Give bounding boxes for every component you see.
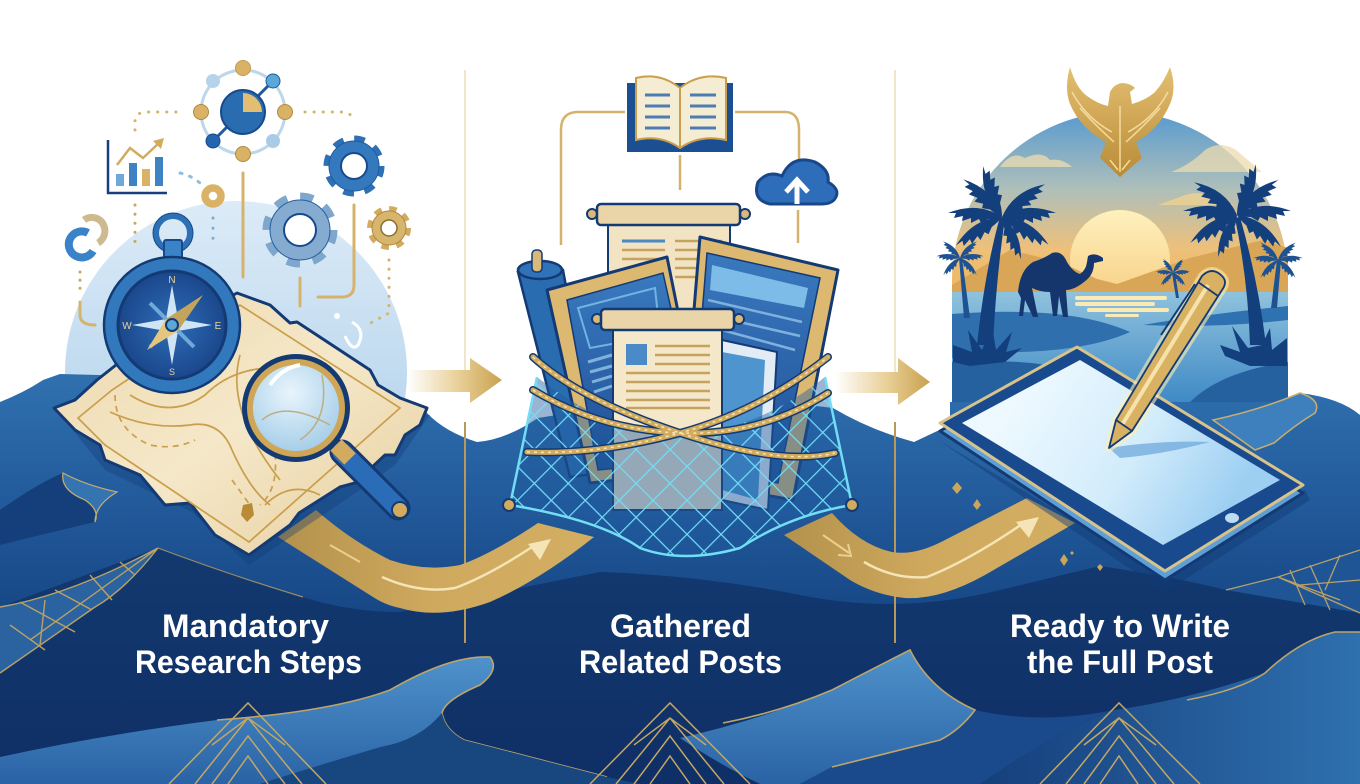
net corner weights (503, 499, 858, 511)
arrow: winding gold ribbon 2 (784, 498, 1075, 598)
icon: cloud upload (756, 160, 837, 204)
tablet: small (722, 340, 777, 510)
icon: compass: E (215, 321, 222, 332)
small white dashes near the circle (334, 313, 361, 347)
curl dune: right (1213, 393, 1317, 450)
panel background: light blue circle (65, 201, 407, 543)
distant hills (952, 240, 1288, 295)
small palms (936, 240, 1303, 318)
heading: the Full Post: the Full Post (1027, 644, 1213, 680)
connector lines (80, 112, 389, 325)
heading: Mandatory: Mandatory (162, 608, 329, 644)
camel (1018, 252, 1103, 317)
dune: lower right (980, 632, 1360, 784)
panel: gathered posts (503, 76, 858, 556)
icon: bar chart (108, 138, 167, 193)
gold triangles (169, 703, 1200, 784)
water bands (1143, 306, 1288, 326)
dunes: upper layer (0, 374, 1360, 784)
dune edges: gold outlines right (723, 632, 1360, 767)
icon: sync rings (69, 217, 105, 257)
palm right (1183, 161, 1291, 345)
icon: gold gear (370, 208, 408, 248)
icon: tablet with stylus (938, 271, 1310, 592)
tablet body edge (940, 355, 1303, 580)
lattice band: left (0, 548, 303, 673)
tablet: back right (680, 237, 838, 500)
dune: lower light left (0, 657, 493, 784)
arrow: gold right arrow 1 (407, 358, 502, 403)
lattice band: right (1226, 550, 1360, 613)
clouds (1000, 145, 1262, 205)
connector lines (561, 112, 799, 245)
icon: compass: W (122, 321, 132, 332)
small gold sparks (952, 482, 1103, 571)
icon: compass (104, 213, 240, 393)
divider lines: upper section (465, 70, 895, 385)
tablet shadow (938, 440, 1310, 592)
panel: research steps icons (69, 60, 409, 325)
front scroll (592, 309, 744, 510)
arrow: winding gold ribbon 1 (278, 510, 594, 613)
home button (1225, 513, 1239, 523)
lake (952, 292, 1288, 402)
curl dune: left (0, 473, 117, 545)
rope (527, 357, 835, 457)
sun reflection (1075, 296, 1169, 317)
icon: small gold ring (205, 188, 221, 204)
dune: lower centre (680, 650, 975, 784)
tablet screen (962, 360, 1280, 545)
back scroll (587, 204, 750, 317)
fishing net (510, 377, 852, 556)
icon: gray blue gear (267, 197, 333, 263)
icon: golden eagle (1067, 67, 1174, 177)
heading: Ready to Write: Ready to Write (1010, 608, 1230, 644)
foreground grass (953, 326, 1287, 366)
sun (1070, 210, 1170, 310)
dune edge: gold outline left (217, 657, 607, 777)
icon: magnifying glass (246, 358, 408, 518)
arrow: gold right arrow 2 (835, 358, 930, 405)
heading: Gathered: Gathered (610, 608, 751, 644)
tablet: back left (547, 257, 710, 483)
heading: Related Posts: Related Posts (579, 644, 782, 680)
heading: Research Steps: Research Steps (135, 644, 362, 680)
panel background: desert sunset arch (936, 112, 1303, 402)
icon: network hub (194, 60, 292, 162)
icon: blue gear (327, 139, 381, 193)
dune: lower dark (260, 713, 640, 784)
icon: treasure map (54, 293, 430, 565)
tablet face (940, 347, 1303, 571)
stylus shadow (1109, 442, 1210, 458)
stylus (1109, 271, 1225, 448)
icon: compass: N (168, 275, 176, 286)
dune: lower centre bottom (800, 710, 1114, 784)
icon: compass: S (169, 367, 175, 377)
icon: open book (627, 76, 733, 152)
dune: navy text band (0, 548, 1360, 784)
rolled blueprint (518, 250, 600, 477)
palm left (948, 163, 1056, 345)
divider lines: lower section (465, 422, 895, 643)
